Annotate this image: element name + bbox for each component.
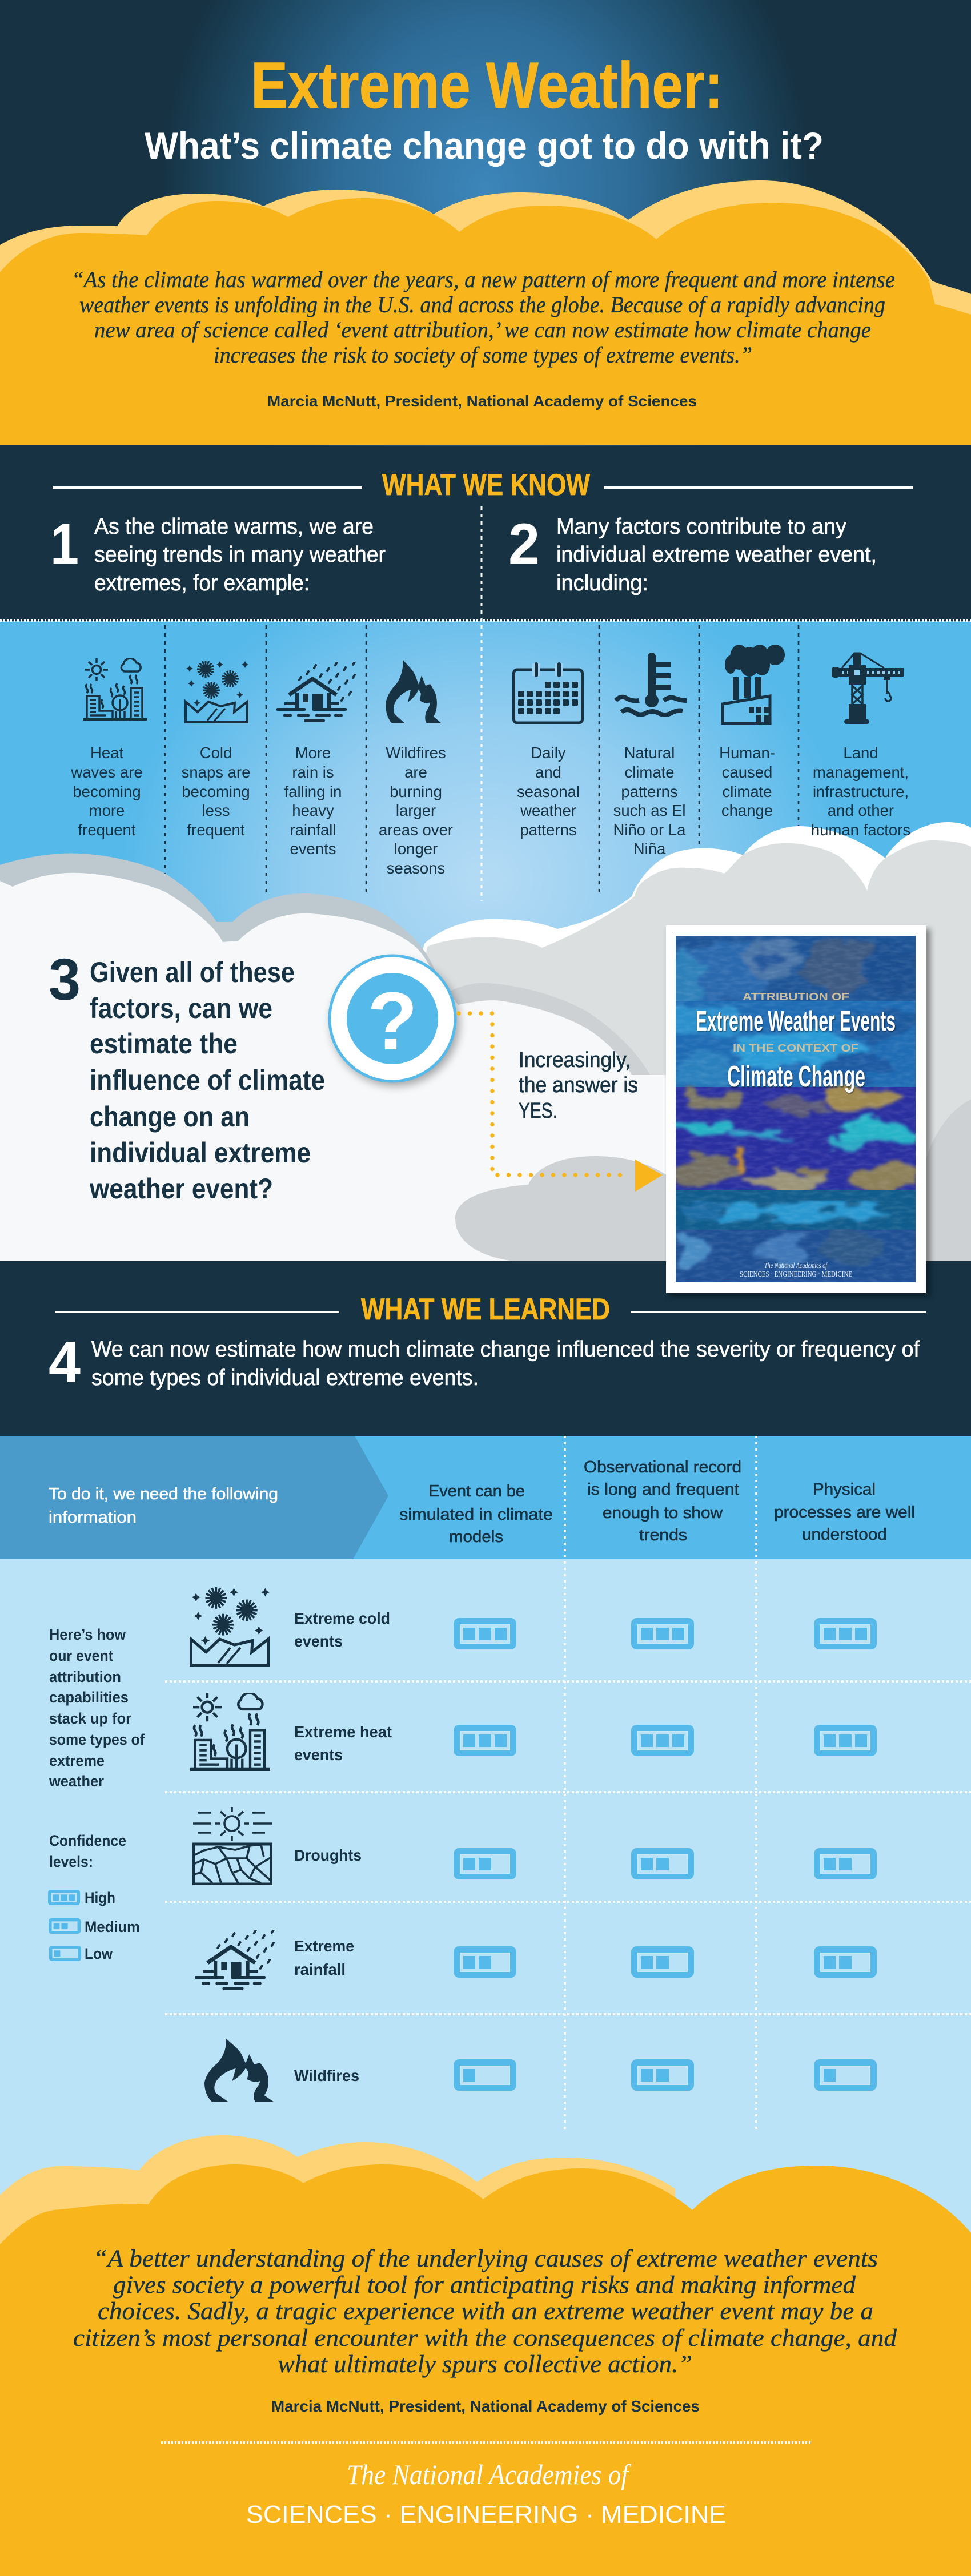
legend: confidence levels: Medium (85, 1918, 140, 1935)
intro text: how capabilities stack up: capabilities (49, 1689, 129, 1706)
point 3 question: weather event? (89, 1173, 273, 1205)
caption: more rain: More (295, 744, 331, 762)
logo: the national academies (246, 2458, 726, 2529)
caption: natural climate patterns (613, 653, 687, 858)
report cover (666, 925, 930, 1297)
intro text: how capabilities stack up: Here’s how (49, 1626, 126, 1643)
caption: wildfires (379, 659, 453, 877)
caption: cold snaps: less (202, 802, 230, 819)
caption: land management: management, (813, 763, 909, 781)
clouds: white front cloud (0, 873, 666, 1261)
bottom quote cloud (0, 2135, 971, 2576)
caption: land management: and other (828, 802, 894, 819)
table header band: To do it, we need the following (49, 1485, 278, 1503)
point 4: 4 (49, 1330, 81, 1395)
point 3 question: estimate the (90, 1028, 238, 1060)
row: extreme rainfall (195, 1930, 877, 1990)
point 3 question: influence of climate (90, 1064, 325, 1096)
cover title text (696, 991, 896, 1279)
intro text: how capabilities stack up: stack up for (49, 1710, 131, 1727)
caption: daily and seasonal patterns: Daily (531, 744, 566, 762)
caption: cold snaps: snaps are (182, 763, 250, 781)
caption: cold snaps: Cold (200, 744, 232, 762)
panel: what we know dark band (0, 446, 971, 621)
table header band: simulated in climate (399, 1506, 553, 1524)
legend: confidence levels: Confidence (49, 1832, 126, 1849)
legend: confidence levels: High (85, 1889, 115, 1906)
title: Extreme Weather: (251, 49, 723, 122)
closing quote text (73, 2245, 897, 2378)
row: extreme heat events (190, 1693, 877, 1771)
quote text: increases the risk to society of some types of extreme events.” (214, 342, 752, 368)
closing quote text: gives society a powerful tool for anticipating risks and making informed (113, 2272, 856, 2299)
point 2: individual extreme weather event, (556, 542, 877, 567)
caption: land management: Land (843, 744, 878, 762)
logo: the national academies: SCIENCES · ENGINEERING · MEDICINE (246, 2501, 726, 2529)
table header band: enough to show (603, 1504, 723, 1522)
caption: cold snaps: frequent (187, 821, 245, 839)
caption: daily and seasonal patterns: weather (520, 802, 576, 819)
caption: daily and seasonal patterns: patterns (520, 821, 577, 839)
cover title text: SCIENCES · ENGINEERING · MEDICINE (740, 1270, 852, 1279)
point 2 (508, 512, 877, 595)
row: extreme cold events (191, 1587, 877, 1665)
caption: human caused climate change: climate (722, 783, 772, 800)
cover title text: ATTRIBUTION OF (743, 991, 849, 1003)
caption: more rain: rain is (292, 763, 334, 781)
caption: land management (811, 653, 910, 839)
legend: confidence levels: levels: (49, 1853, 93, 1870)
row: droughts: Droughts (294, 1846, 362, 1864)
heading: what we know: WHAT WE KNOW (382, 468, 590, 502)
clouds: grey band (451, 983, 650, 1085)
closing quote text: what ultimately spurs collective action.” (278, 2351, 692, 2378)
heading: what we learned: WHAT WE LEARNED (361, 1293, 610, 1326)
title (145, 49, 824, 167)
caption: daily and seasonal patterns: seasonal (517, 783, 580, 800)
caption: wildfires: areas over (379, 821, 453, 839)
table header band: Event can be (428, 1482, 525, 1500)
point 2: Many factors contribute to any (556, 514, 846, 539)
quote text: new area of science called ‘event attribution,’ we can now estimate how climate change (94, 317, 871, 343)
caption: human caused climate change: caused (722, 763, 772, 781)
caption: natural climate patterns: Niño or La (613, 821, 686, 839)
cover title text: Climate Change (727, 1060, 865, 1093)
caption: human caused climate change: Human- (719, 744, 775, 762)
row: extreme heat events: events (294, 1746, 343, 1764)
caption: more rain: rainfall (290, 821, 336, 839)
logo: the national academies: The National Academies of (347, 2458, 632, 2490)
intro text: how capabilities stack up: some types of (49, 1731, 145, 1748)
caption: wildfires: Wildfires (386, 744, 446, 762)
clouds: lower grey cloud behind arrow (455, 1156, 668, 1261)
row: extreme rainfall: rainfall (294, 1961, 346, 1978)
point 3 question: 3 (49, 947, 81, 1012)
caption: daily and seasonal patterns (514, 663, 583, 839)
answer text: the answer is (519, 1073, 638, 1097)
intro text: how capabilities stack up: our event (49, 1647, 113, 1664)
caption: land management: human factors (811, 821, 910, 839)
arrow: dotted path to report (459, 1013, 663, 1192)
row: extreme rainfall: Extreme (294, 1937, 354, 1955)
caption: natural climate patterns: Natural (624, 744, 675, 762)
caption: heat waves: becoming (73, 783, 141, 800)
closing quote attribution: Marcia McNutt, President, National Academy of Sciences (271, 2397, 700, 2415)
caption: wildfires: larger (396, 802, 436, 819)
point 4 (49, 1330, 920, 1395)
point 3 question: Given all of these (90, 956, 295, 988)
caption: daily and seasonal patterns: and (535, 763, 561, 781)
table body background (0, 1559, 971, 2358)
row: extreme cold events: Extreme cold (294, 1609, 390, 1627)
caption: wildfires: longer (394, 840, 438, 858)
caption: land management: infrastructure, (813, 783, 909, 800)
row: droughts (193, 1807, 877, 1884)
table header band: Observational record (584, 1458, 741, 1476)
table header band: models (449, 1528, 503, 1546)
intro text: how capabilities stack up: weather (49, 1773, 104, 1790)
point 4: some types of individual extreme events. (91, 1366, 479, 1390)
panel: what we learned dark band (0, 1261, 971, 1436)
point 1: As the climate warms, we are (94, 514, 374, 539)
point 1: extremes, for example: (94, 571, 310, 595)
point 3 question: individual extreme (90, 1137, 311, 1169)
point 3 question: factors, can we (90, 992, 272, 1024)
row: extreme cold events: events (294, 1632, 343, 1650)
icon: question mark badge (330, 956, 459, 1086)
title: What’s climate change got to do with it? (145, 124, 824, 167)
table header band: trends (639, 1526, 687, 1544)
intro text: how capabilities stack up (49, 1626, 145, 1790)
caption: cold snaps (182, 661, 250, 839)
caption: human caused climate change (719, 645, 785, 819)
point 2: including: (556, 571, 648, 595)
table header band (0, 1436, 971, 1559)
table header band: is long and frequent (587, 1480, 739, 1499)
point 1: 1 (50, 512, 79, 577)
caption: cold snaps: becoming (182, 783, 250, 800)
caption: natural climate patterns: such as El (613, 802, 685, 819)
caption: natural climate patterns: Niña (633, 840, 666, 858)
quote text: weather events is unfolding in the U.S. and across the globe. Because of a rapidly advancing (79, 292, 885, 317)
table header band: information (49, 1508, 137, 1527)
quote text (71, 267, 895, 368)
legend: confidence levels: Low (85, 1945, 113, 1962)
icon: question mark badge: ? (367, 975, 418, 1067)
intro text: how capabilities stack up: attribution (49, 1668, 121, 1685)
caption: heat waves: Heat (90, 744, 123, 762)
quote text: “As the climate has warmed over the years, a new pattern of more frequent and more intense (71, 267, 895, 292)
point 2: 2 (508, 512, 540, 577)
caption: more rain: events (290, 840, 336, 858)
caption: natural climate patterns: climate (624, 763, 675, 781)
row: wildfires (204, 2038, 877, 2102)
caption: wildfires: seasons (387, 859, 445, 877)
heading: what we learned (55, 1293, 926, 1326)
caption: natural climate patterns: patterns (621, 783, 678, 800)
closing quote text: “A better understanding of the underlying causes of extreme weather events (93, 2245, 878, 2272)
caption: heat waves: waves are (70, 763, 143, 781)
clouds: dark grey left cloud (0, 854, 440, 1085)
cover title text: IN THE CONTEXT OF (733, 1043, 858, 1054)
closing quote text: choices. Sadly, a tragic experience with an extreme weather event may be a (98, 2298, 873, 2325)
answer text: YES. (519, 1099, 557, 1123)
caption: more rain (276, 662, 355, 858)
table header band: understood (802, 1526, 887, 1544)
answer text (519, 1048, 638, 1123)
caption: human caused climate change: change (721, 802, 773, 819)
header background (0, 0, 971, 446)
clouds: grey cloud right (423, 840, 971, 1261)
clouds: far right grey cloud (926, 1099, 971, 1261)
caption: more rain: falling in (284, 783, 342, 800)
top quote cloud (0, 180, 971, 445)
answer text: Increasingly, (519, 1048, 631, 1072)
row: wildfires: Wildfires (294, 2067, 359, 2084)
legend: confidence levels (48, 1832, 140, 1962)
caption: wildfires: are (404, 763, 427, 781)
point 3 question (49, 947, 325, 1205)
caption: heat waves: frequent (78, 821, 136, 839)
heading: what we know (53, 468, 913, 502)
caption: heat waves: more (89, 802, 125, 819)
table header band: processes are well (774, 1503, 915, 1522)
point 1: seeing trends in many weather (94, 542, 386, 567)
closing quote text: citizen’s most personal encounter with the consequences of climate change, and (73, 2325, 897, 2352)
table header band: Physical (813, 1480, 876, 1499)
cover title text: The National Academies of (764, 1262, 828, 1270)
caption: heat waves (70, 658, 147, 839)
point 1 (50, 512, 386, 595)
row: extreme heat events: Extreme heat (294, 1723, 392, 1741)
clouds: white back cloud right (420, 822, 971, 1261)
point 3 question: change on an (90, 1101, 250, 1133)
panel: sky gradient (0, 621, 971, 1054)
caption: more rain: heavy (292, 802, 334, 819)
intro text: how capabilities stack up: extreme (49, 1752, 105, 1769)
quote attribution: Marcia McNutt, President, National Academy of Sciences (267, 392, 697, 410)
caption: wildfires: burning (390, 783, 442, 800)
point 4: We can now estimate how much climate change influenced the severity or frequency of (91, 1337, 920, 1362)
